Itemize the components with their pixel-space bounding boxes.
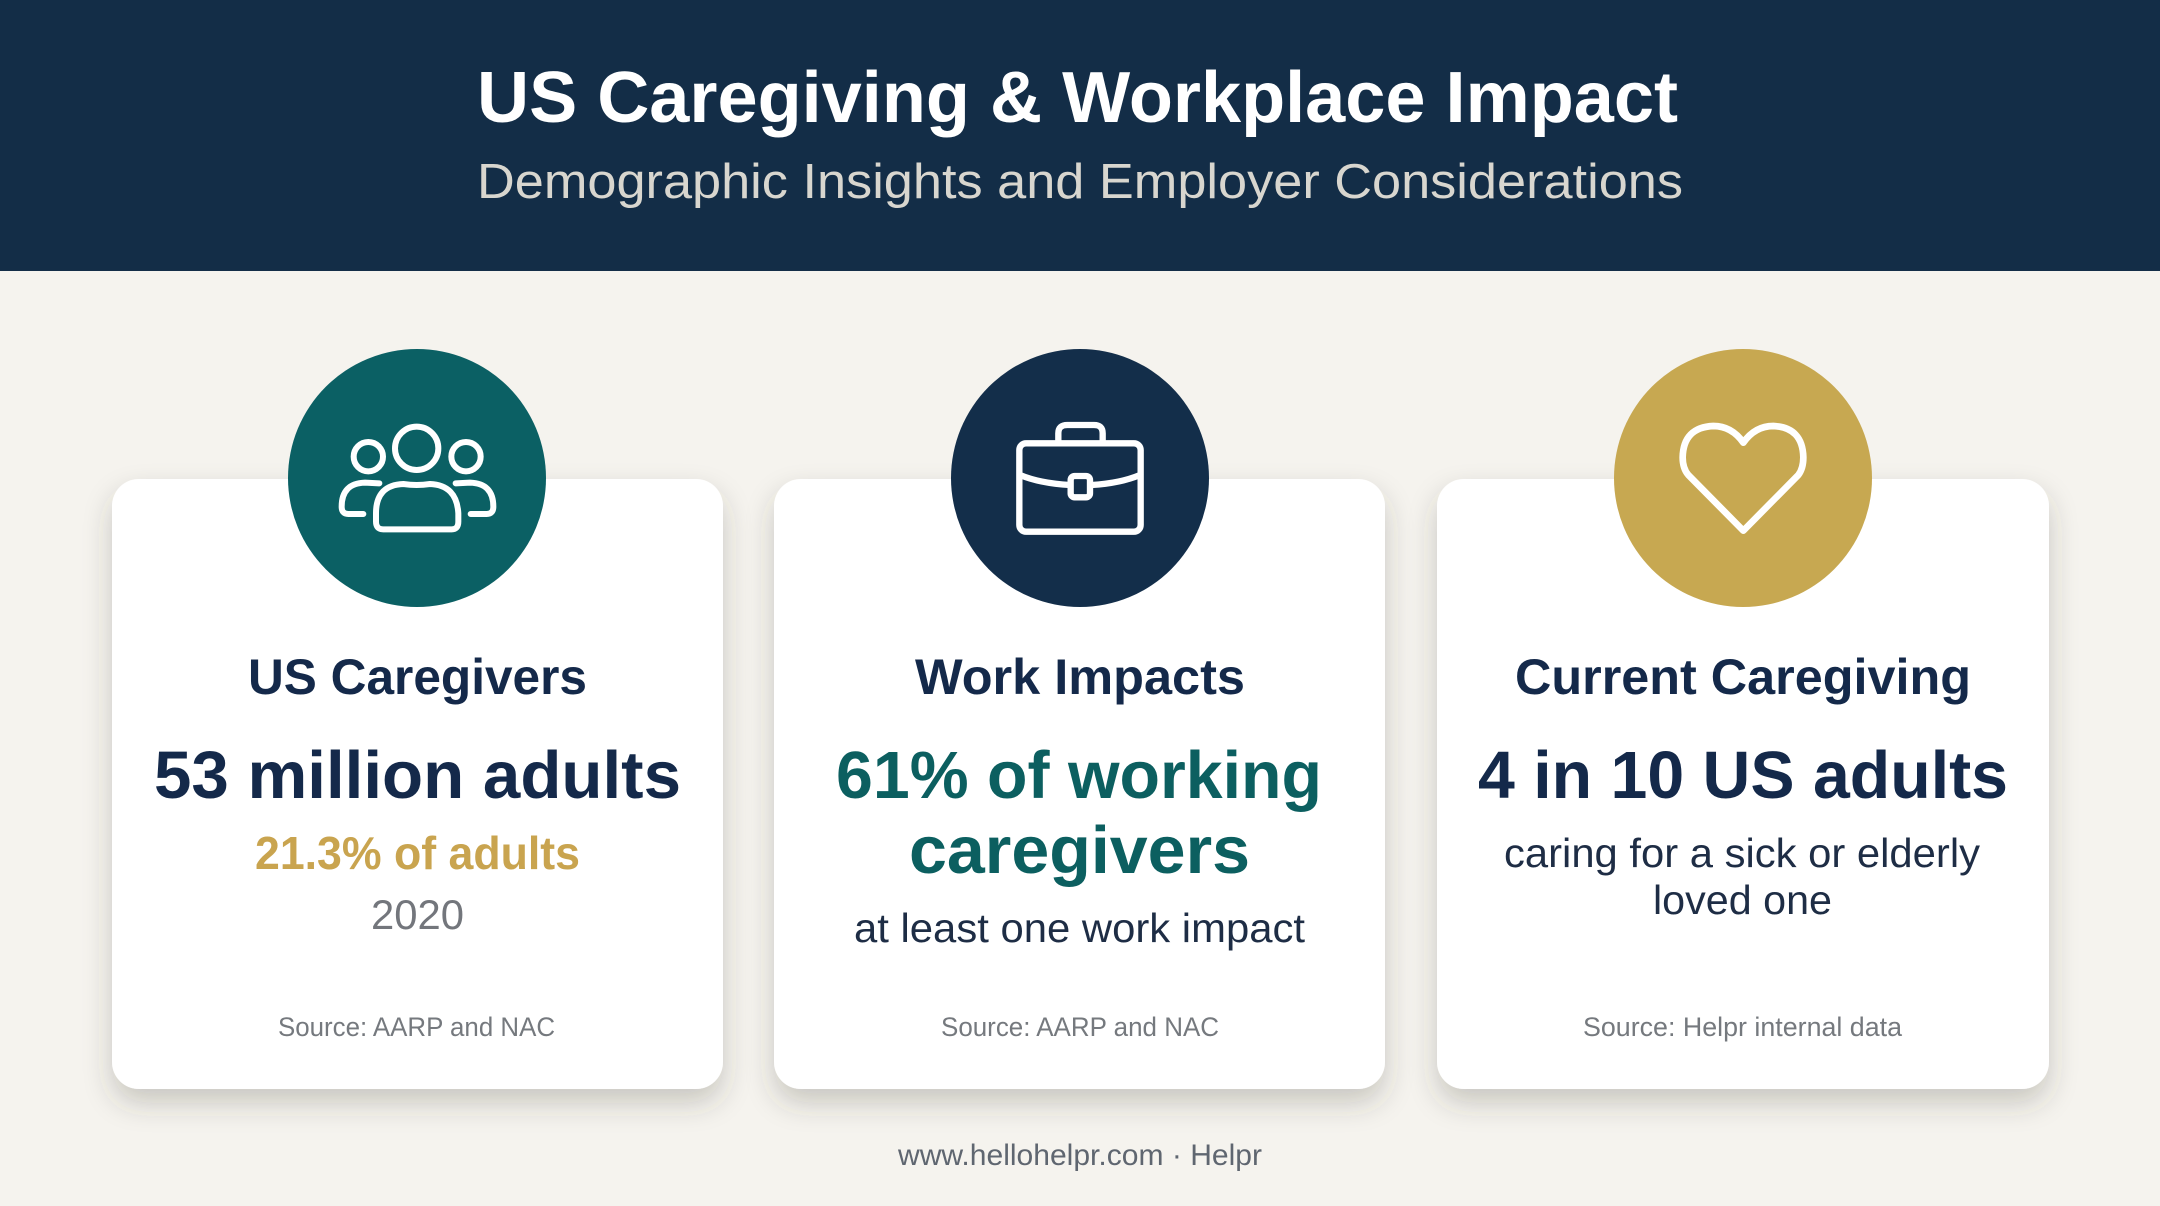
source: Source: AARP and NAC (941, 1012, 1219, 1042)
main stat: caregivers (909, 813, 1250, 888)
description: at least one work impact (854, 905, 1306, 951)
year: 2020 (371, 891, 464, 938)
heading: Current Caregiving (1515, 649, 1971, 705)
subtitle: Demographic Insights and Employer Considerations (477, 155, 1683, 209)
main stat: 61% of working (836, 738, 1322, 813)
main stat: 4 in 10 US adults (1478, 738, 2008, 813)
panel: US Caregivers (112, 349, 723, 1089)
source: Source: AARP and NAC (278, 1012, 555, 1042)
main stat (836, 738, 1322, 888)
main stat: 53 million adults (154, 738, 681, 813)
panel: Current Caregiving (1437, 349, 2049, 1089)
icon: briefcase in navy circle (951, 349, 1209, 607)
heading: Work Impacts (915, 649, 1245, 705)
panel: Work Impacts (774, 349, 1385, 1089)
source: Source: Helpr internal data (1583, 1012, 1903, 1042)
description (1504, 830, 1981, 923)
description: loved one (1653, 877, 1832, 923)
description: caring for a sick or elderly (1504, 830, 1981, 876)
icon: heart in gold circle (1614, 349, 1872, 607)
title: US Caregiving & Workplace Impact (477, 58, 1678, 138)
footer: www.hellohelpr.com · Helpr (897, 1139, 1262, 1172)
icon: people in teal circle (288, 349, 546, 607)
header band (0, 0, 2160, 271)
heading: US Caregivers (248, 649, 587, 705)
percentage: 21.3% of adults (255, 827, 580, 879)
